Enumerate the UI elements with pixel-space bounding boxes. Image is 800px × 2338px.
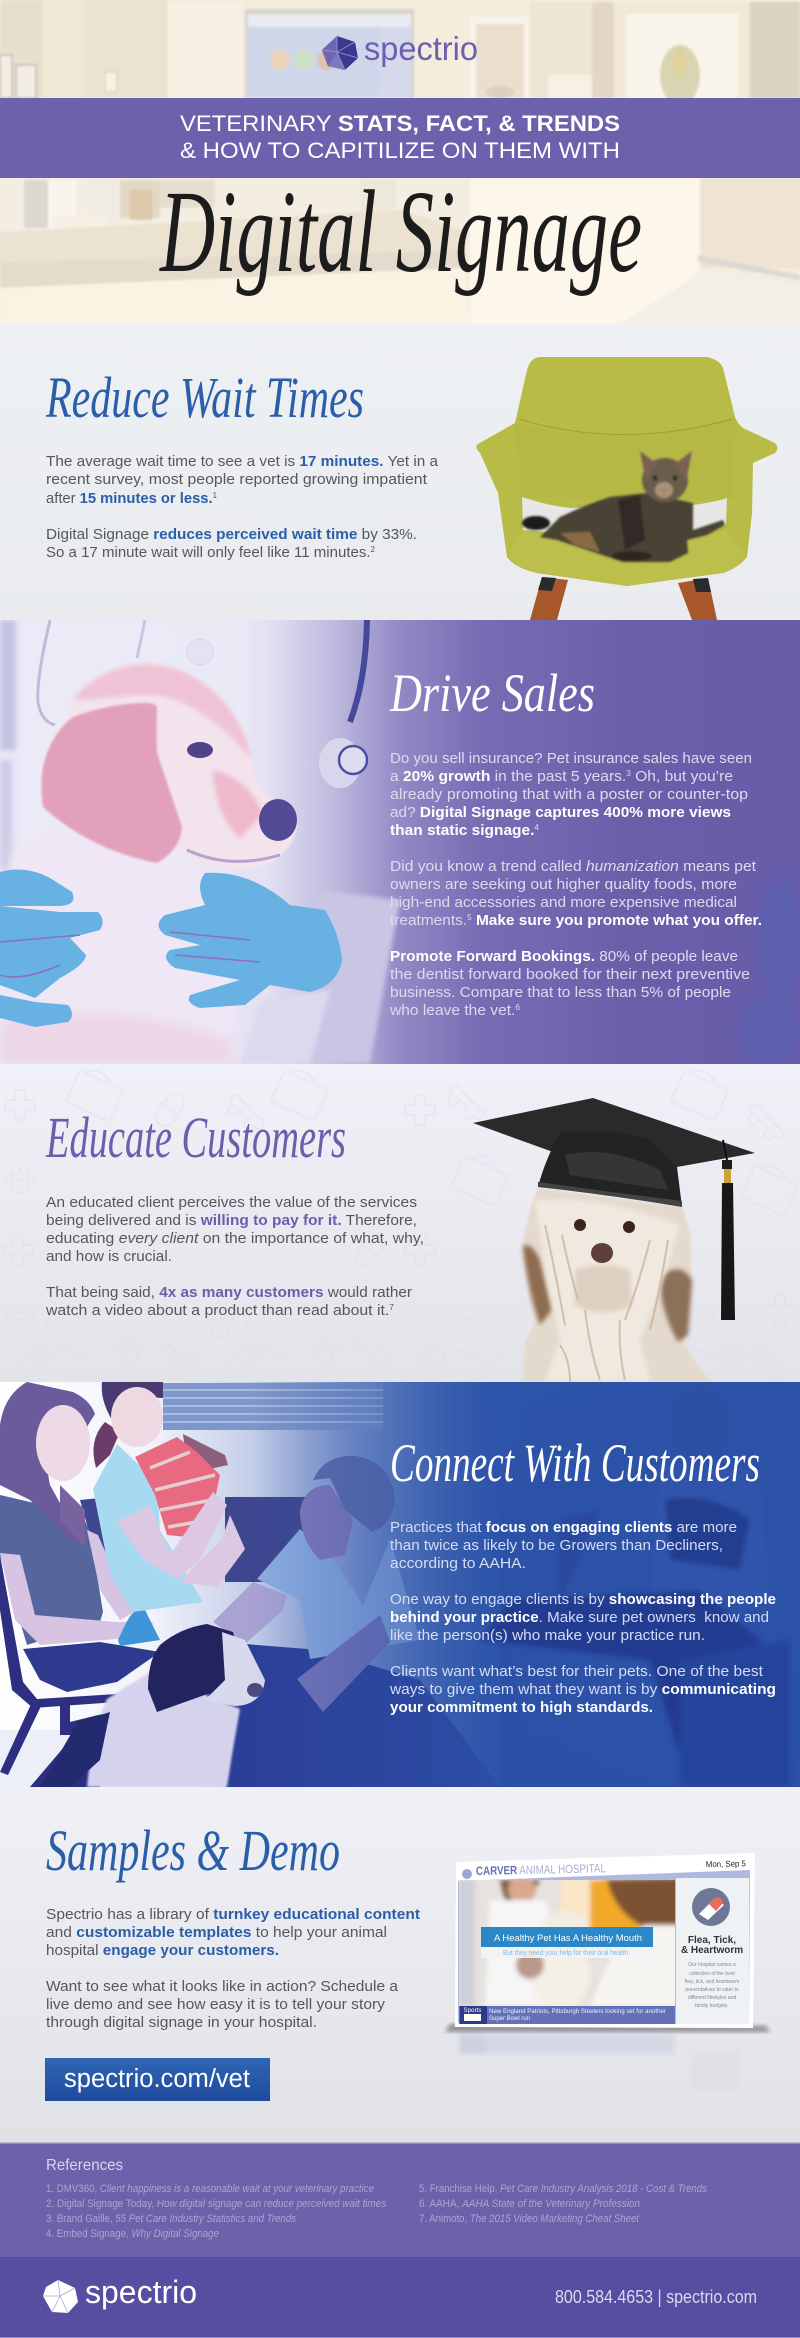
reference list right column: 6. AAHA, AAHA State of the Veterinary Profession <box>419 2198 640 2210</box>
text block: high standards: Clients want what’s best for their pets. One of the best <box>390 1663 764 1680</box>
text block: showcasing people: like the person(s) who make your practice run. <box>390 1627 705 1644</box>
text block: growers and decliners: Practices that focus on engaging clients are more <box>390 1519 737 1536</box>
chair legs <box>530 577 717 620</box>
logo: spectrio <box>322 36 477 70</box>
man's trousers <box>204 1644 487 1787</box>
girl <box>0 1382 160 1692</box>
button: spectrio.com/vet <box>45 2058 270 2101</box>
screen side panel: different lifestyles and <box>688 1995 736 2001</box>
text block: live demo: through digital signage in your hospital. <box>46 2014 317 2031</box>
heading: educate customers: Educate Customers <box>45 1105 346 1170</box>
screen shadow and reflection <box>445 2024 770 2090</box>
chairs and floor <box>0 1497 307 1787</box>
photo: vet with puppy <box>0 620 400 1064</box>
text block: educated clients: being delivered and is willing to pay for it. Therefore, <box>46 1212 417 1229</box>
panel: hero header <box>0 0 800 324</box>
panel: drive sales <box>0 620 800 1064</box>
text block: insurance and signage: a 20% growth in the past 5 years. <box>390 768 621 785</box>
cat <box>522 451 725 562</box>
screen news ticker: Sports <box>464 2008 482 2014</box>
text block: forward bookings <box>389 948 750 1019</box>
panel: footer <box>0 2257 800 2338</box>
screen banner <box>481 1927 653 1958</box>
text block: high standards: your commitment to high standards. <box>390 1699 653 1716</box>
screen side panel <box>676 1878 749 2024</box>
text block: insurance and signage: 3 <box>626 769 631 778</box>
text block: library: and customizable templates to help your animal <box>46 1924 387 1941</box>
hero background photo: reception <box>0 0 800 324</box>
title band <box>0 98 800 178</box>
spaniel dog <box>40 1624 265 1787</box>
text block: wait statistics: The average wait time to see a vet is 17 minutes. Yet in a <box>46 453 439 470</box>
screen news ticker: Super Bowl run <box>489 2015 530 2022</box>
text block: forward bookings: the dentist forward booked for their next preventive <box>390 966 750 983</box>
text block: wait statistics <box>46 453 439 561</box>
heading: references: References <box>46 2157 123 2174</box>
screen side panel: preventatives to cater to <box>685 1987 739 1993</box>
text block: video stat <box>45 1284 412 1319</box>
text block: high standards <box>389 1663 776 1716</box>
reference list left column: 2. Digital Signage Today, How digital signage can reduce perceived wait times <box>46 2198 386 2210</box>
text block: wait statistics: after 15 minutes or less. <box>46 490 215 507</box>
text block: wait statistics: So a 17 minute wait will only feel like 11 minutes. <box>46 544 370 561</box>
text block: live demo <box>46 1978 399 2031</box>
screen banner: A Healthy Pet Has A Healthy Mouth <box>494 1933 642 1944</box>
screen news ticker: New England Patriots, Pittsburgh Steelers looking set for another <box>489 2008 666 2015</box>
photo: dog in graduation cap <box>473 1098 755 1382</box>
wall screen in background <box>245 9 414 98</box>
heading: reduce wait times: Reduce Wait Times <box>45 365 364 430</box>
panel: educate customers <box>0 1064 800 1382</box>
text block: live demo: live demo and see how easy it is to tell your story <box>46 1996 386 2013</box>
chair opening <box>522 497 727 532</box>
woman holding puppy <box>93 1382 245 1612</box>
text block: wait statistics: 2 <box>371 545 376 554</box>
screen header text: CARVER ANIMAL HOSPITAL <box>476 1861 606 1878</box>
text block: video stat: That being said, 4x as many customers would rather <box>46 1284 412 1301</box>
text block: growers and decliners: than twice as likely to be Growers than Decliners, <box>390 1537 723 1554</box>
panel: samples and demo <box>0 1787 800 2143</box>
text block: educated clients: and how is crucial. <box>46 1248 172 1265</box>
text block: insurance and signage: already promoting that with a poster or counter-top <box>390 786 748 803</box>
screen side panel: Flea, Tick, <box>688 1935 736 1946</box>
sample signage screen <box>445 1853 770 2090</box>
text block: live demo: Want to see what it looks like in action? Schedule a <box>46 1978 399 1995</box>
background woman and cat <box>480 1387 790 1787</box>
reference list left column: 3. Brand Gaille, 55 Pet Care Industry Statistics and Trends <box>46 2213 296 2225</box>
faint background flowers <box>746 888 796 1058</box>
text block: insurance and signage: ad? Digital Signage captures 400% more views <box>390 804 731 821</box>
graduation cap <box>473 1098 755 1320</box>
panel: references <box>0 2142 800 2257</box>
dog <box>522 1188 710 1382</box>
text block: educated clients: educating every client on the importance of what, why, <box>46 1230 424 1247</box>
icon: white gem logo <box>43 2280 78 2313</box>
title line one: VETERINARY STATS, FACT, & TRENDS <box>180 111 620 136</box>
screen side panel: flea, tick, and heartworm <box>685 1979 739 1985</box>
screen side panel: Our hospital carries a <box>688 1962 736 1968</box>
text block: humanization: Did you know a trend called humanization means pet <box>390 858 757 875</box>
photo: cat on yellow chair <box>476 357 778 620</box>
text block: forward bookings: 6 <box>515 1003 521 1012</box>
text block: showcasing people <box>390 1591 776 1644</box>
text block: humanization: treatments. <box>390 912 465 929</box>
text block: insurance and signage: Do you sell insurance? Pet insurance sales have seen <box>390 750 752 767</box>
heading: samples and demo: Samples & Demo <box>46 1818 340 1883</box>
text block: humanization: Make sure you promote what you offer. <box>472 912 762 929</box>
reference list right column: 7. Animoto, The 2015 Video Marketing Cheat Sheet <box>419 2213 640 2225</box>
screen side panel: collection of the best <box>689 1971 735 1977</box>
text block: forward bookings: Promote Forward Bookings. 80% of people leave <box>390 948 738 965</box>
text block: wait statistics: 1 <box>213 491 218 500</box>
text block: forward bookings: who leave the vet. <box>390 1002 511 1019</box>
text block: educated clients <box>46 1194 424 1265</box>
text block: growers and decliners <box>390 1519 737 1572</box>
icon: gem logo <box>322 36 358 70</box>
text block: humanization: high-end accessories and more expensive medical <box>390 894 737 911</box>
screen photo <box>459 1877 680 2011</box>
text block: educated clients: An educated client perceives the value of the services <box>46 1194 417 1211</box>
footer wordmark: spectrio <box>85 2274 197 2310</box>
reference list left column: 1. DMV360, Client happiness is a reasonable wait at your veterinary practice <box>46 2183 374 2195</box>
screen header text: Mon, Sep 5 <box>706 1858 746 1869</box>
reference list left column <box>46 2183 386 2240</box>
text block: forward bookings: business. Compare that to less than 5% of people <box>390 984 731 1001</box>
text block: wait statistics: Digital Signage reduces perceived wait time by 33%. <box>46 526 417 543</box>
panel: connect with customers <box>0 1382 800 1787</box>
chair body <box>476 357 778 586</box>
reference list right column <box>419 2183 707 2225</box>
reference list right column: 5. Franchise Help, Pet Care Industry Analysis 2018 - Cost & Trends <box>419 2183 707 2195</box>
blue gloves <box>0 870 342 1027</box>
photo: family at the vet <box>0 1382 800 1787</box>
footer contact details: 800.584.4653 | spectrio.com <box>555 2287 757 2307</box>
button: spectrio.com/vet: spectrio.com/vet <box>64 2065 250 2093</box>
screen header text <box>476 1858 746 1878</box>
screen side panel: family budgets. <box>695 2003 729 2009</box>
text block: library <box>46 1906 420 1959</box>
text block: insurance and signage: than static signage. <box>390 822 534 839</box>
screen side panel: & Heartworm <box>681 1945 743 1956</box>
text block: humanization: owners are seeking out higher quality foods, more <box>390 876 737 893</box>
text block: humanization <box>390 858 762 929</box>
text block: library: hospital engage your customers. <box>46 1942 279 1959</box>
reference list left column: 4. Embed Signage, Why Digital Signage <box>46 2228 219 2240</box>
text block: humanization: 5 <box>467 913 472 922</box>
text block: insurance and signage: Oh, but you’re <box>631 768 733 785</box>
heading: drive sales: Drive Sales <box>389 663 595 723</box>
puppy <box>0 662 297 1064</box>
text block: insurance and signage <box>390 750 752 839</box>
lab coat and stethoscope <box>0 620 400 1064</box>
screen banner: But they need your help for their oral health <box>503 1950 628 1957</box>
text block: insurance and signage: 4 <box>534 823 540 832</box>
text block: library: Spectrio has a library of turnkey educational content <box>46 1906 420 1923</box>
text block: growers and decliners: according to AAHA. <box>390 1555 526 1572</box>
text block: video stat: 7 <box>389 1303 395 1312</box>
panel: reduce wait times <box>46 357 778 620</box>
text block: wait statistics: recent survey, most people reported growing impatient <box>46 471 428 488</box>
text block: high standards: ways to give them what they want is by communicating <box>389 1681 776 1698</box>
logo wordmark: spectrio <box>364 30 478 67</box>
title line two: & HOW TO CAPITILIZE ON THEM WITH <box>180 138 620 163</box>
text block: video stat: watch a video about a product than read about it. <box>46 1302 371 1319</box>
man with clipboard <box>213 1456 420 1712</box>
screen news ticker <box>459 2006 675 2024</box>
text block: showcasing people: behind your practice. Make sure pet owners know and <box>390 1609 769 1626</box>
text block: showcasing people: One way to engage clients is by showcasing the people <box>390 1591 776 1608</box>
